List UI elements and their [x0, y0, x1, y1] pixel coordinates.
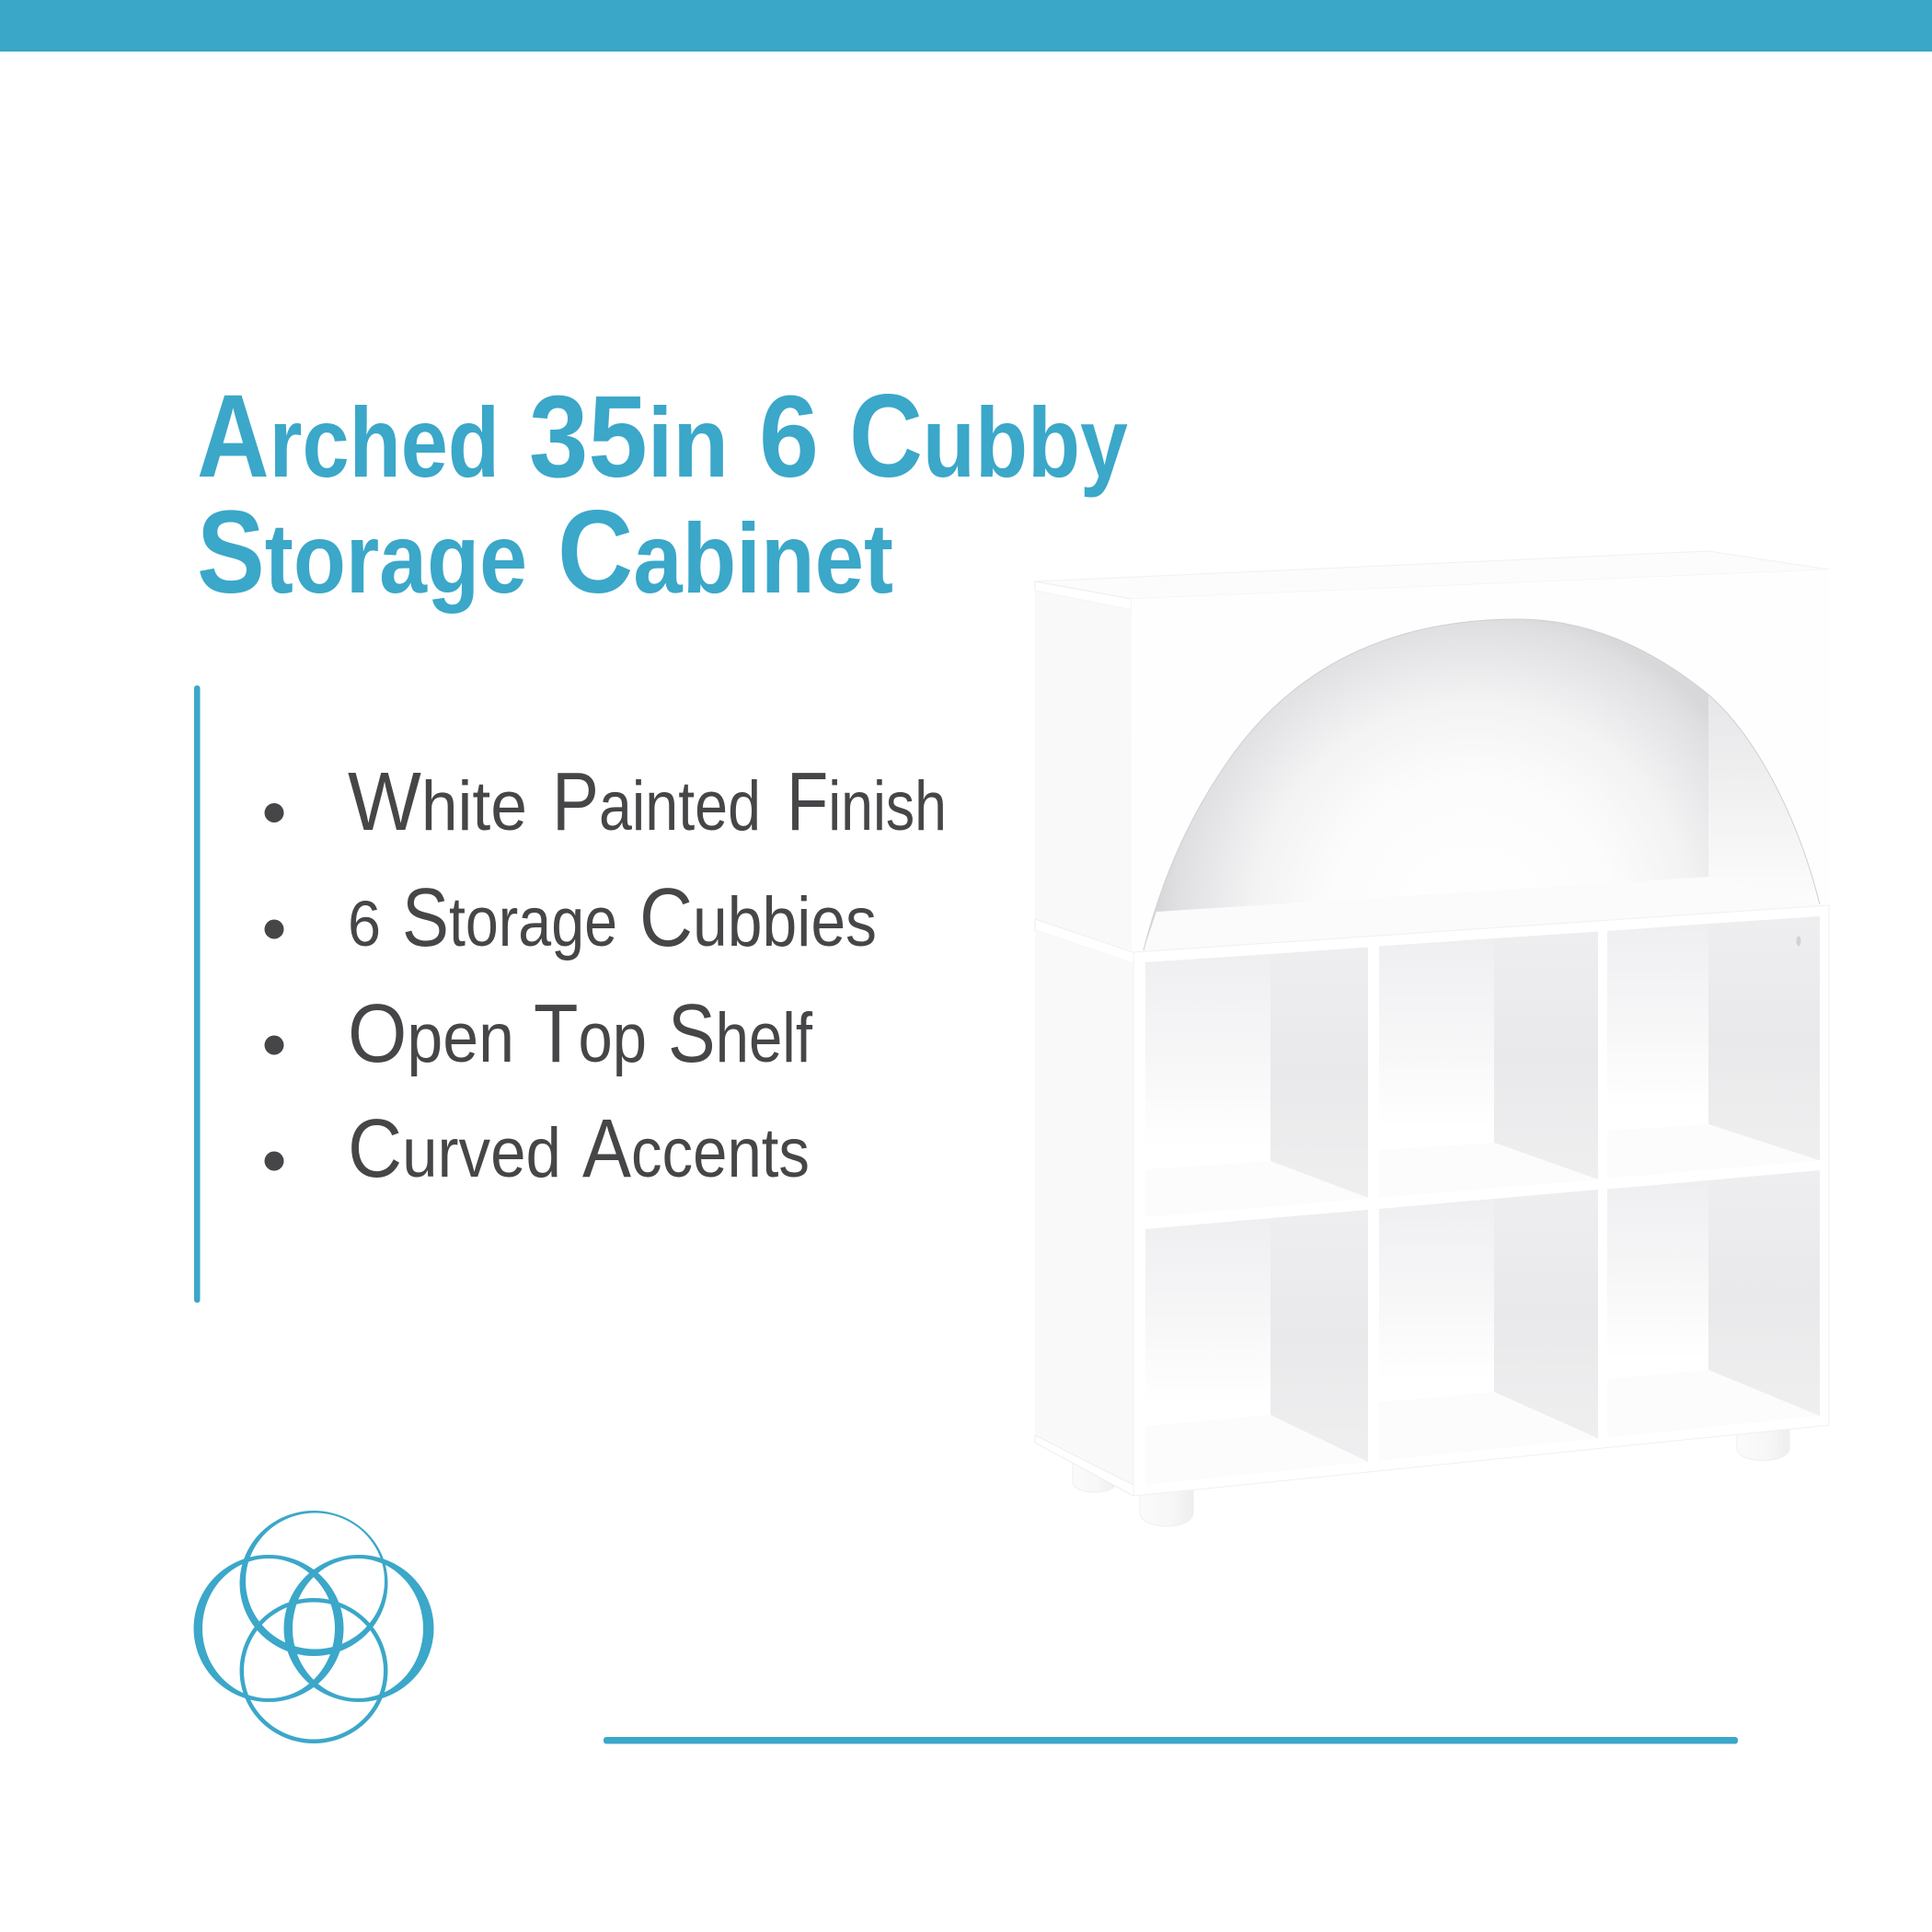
logo: interlocking circles [194, 1511, 434, 1743]
lower front frame [1133, 905, 1829, 1496]
cubby 5 [1379, 1190, 1598, 1461]
title: Arched [197, 371, 500, 502]
bullet item: 6 storage cubbies: 6 [348, 888, 381, 960]
top surface [1035, 551, 1829, 599]
arch back wall [1145, 620, 1708, 944]
bullet item: curved accents: Curved [348, 1103, 561, 1195]
arch opening [1141, 616, 1826, 957]
title: Cabinet [558, 487, 893, 618]
bullet item: white painted finish: White [348, 756, 527, 848]
title: 6 [759, 372, 819, 501]
title: Storage [197, 487, 527, 618]
arch outline [1144, 619, 1820, 950]
bullet item: open top shelf [265, 988, 813, 1080]
title: Cubby [849, 371, 1128, 502]
feature list [265, 756, 947, 1195]
bullet item: 6 storage cubbies: Cubbies [639, 872, 877, 964]
arch right inner wall [1708, 696, 1820, 904]
peg hole [1796, 937, 1801, 946]
bottom slab left edge [1035, 1435, 1133, 1496]
bullet item: open top shelf: Shelf [668, 988, 813, 1080]
top banner [0, 0, 1932, 52]
bullet item: white painted finish: Painted [552, 756, 761, 848]
vertical accent rule [194, 685, 201, 1303]
seam band on left side [1035, 919, 1133, 963]
upper left side panel [1035, 591, 1132, 950]
cubby 2 [1379, 931, 1598, 1198]
cubby 4 [1145, 1210, 1368, 1485]
lower left side panel [1035, 930, 1135, 1496]
bullet item: white painted finish: Finish [787, 756, 947, 848]
title: 35in [529, 372, 729, 501]
top slab left edge [1035, 581, 1132, 610]
bottom rule [604, 1737, 1738, 1744]
title [197, 371, 1128, 618]
cubby 1 [1145, 948, 1368, 1217]
bullet item: open top shelf: Top [534, 988, 647, 1080]
cabinet product illustration [1035, 551, 1829, 1526]
bullet item: open top shelf: Open [348, 988, 514, 1080]
bullet item: 6 storage cubbies: Storage [402, 872, 617, 964]
cubby 3 [1607, 916, 1820, 1179]
bullet item: curved accents [265, 1103, 810, 1195]
upper front panel with arch [1132, 569, 1829, 957]
bullet item: white painted finish [265, 756, 947, 848]
bullet item: curved accents: Accents [582, 1103, 810, 1195]
bullet item: 6 storage cubbies [265, 872, 877, 964]
cubby 6 [1607, 1170, 1820, 1437]
open top shelf surface [1144, 877, 1820, 957]
cabinet feet [1073, 1421, 1789, 1526]
